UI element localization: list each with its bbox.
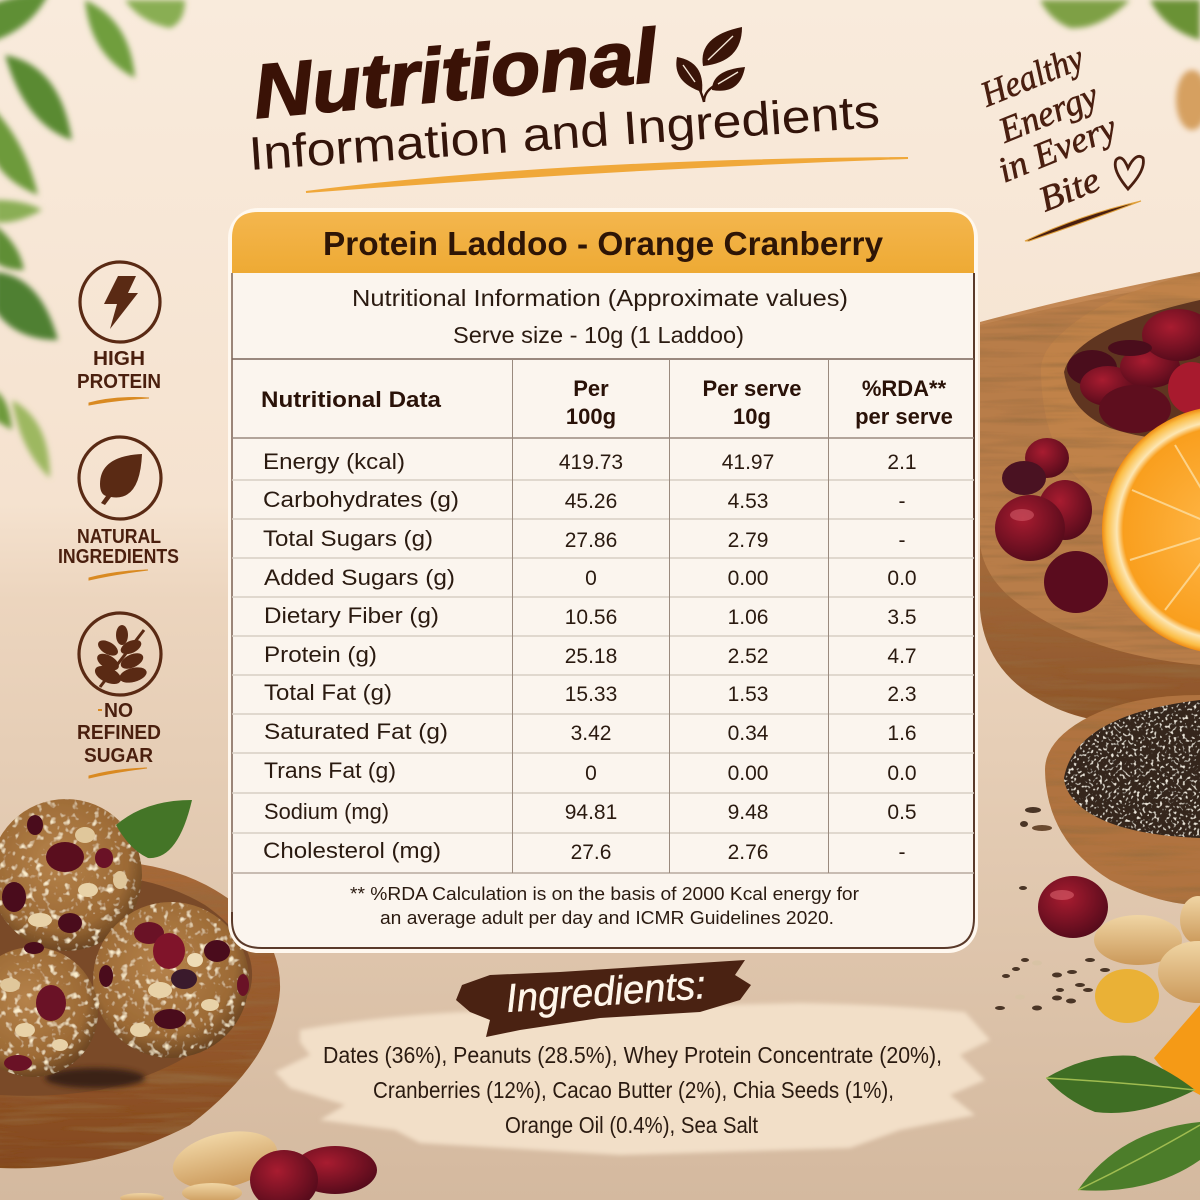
laddoo 2 bbox=[93, 902, 249, 1058]
table column: per serve bbox=[722, 451, 774, 864]
table row labels: Cholesterol (mg) bbox=[263, 838, 441, 863]
title underline bbox=[306, 158, 908, 192]
leaf behind bowl bbox=[116, 800, 192, 858]
table column headings: 100g bbox=[566, 404, 616, 429]
table column: %RDA: - bbox=[898, 529, 906, 552]
table column: %RDA bbox=[887, 451, 917, 864]
table column: per serve: 0.00 bbox=[728, 567, 768, 590]
card subtitle bbox=[352, 285, 848, 348]
table row labels: Total Sugars (g) bbox=[263, 526, 433, 551]
card header bbox=[232, 212, 974, 273]
icon: title leaves bbox=[676, 27, 745, 102]
badge: natural ingredients: NATURAL bbox=[77, 526, 161, 548]
table column: per serve: 2.76 bbox=[728, 841, 768, 864]
footnote bbox=[350, 884, 859, 928]
badge: high protein: PROTEIN bbox=[77, 371, 161, 393]
ingredients list: Dates (36%), Peanuts (28.5%), Whey Protein Concentrate (20%), bbox=[323, 1042, 942, 1068]
badge: natural ingredients: INGREDIENTS bbox=[58, 546, 179, 568]
table column: per serve: 41.97 bbox=[722, 451, 774, 474]
table column: %RDA: 0.0 bbox=[887, 762, 917, 785]
icon: heart bbox=[1115, 156, 1143, 189]
table row labels: Total Fat (g) bbox=[264, 680, 392, 705]
table column: per 100g: 3.42 bbox=[571, 722, 611, 745]
table column: per 100g: 27.86 bbox=[565, 529, 617, 552]
decorative blurred foliage: top right bbox=[1040, 0, 1200, 130]
ingredients list: Orange Oil (0.4%), Sea Salt bbox=[505, 1112, 759, 1138]
table row labels: Protein (g) bbox=[264, 642, 377, 667]
ingredients list: Cranberries (12%), Cacao Butter (2%), Chia Seeds (1%), bbox=[373, 1077, 894, 1103]
ingredients banner: Ingredients: bbox=[505, 963, 707, 1021]
orange half bbox=[1102, 406, 1200, 654]
table column: per serve: 2.79 bbox=[728, 529, 768, 552]
table column: %RDA: 3.5 bbox=[887, 606, 917, 629]
table column: per 100g bbox=[559, 451, 623, 864]
loose cranberries on board bbox=[995, 438, 1108, 613]
card subtitle: Serve size - 10g (1 Laddoo) bbox=[453, 322, 744, 348]
table column: per serve: 1.06 bbox=[728, 606, 768, 629]
tagline: Bite bbox=[1033, 159, 1105, 219]
table row labels bbox=[263, 449, 459, 863]
tagline: Healthy bbox=[974, 37, 1089, 115]
table row labels: Dietary Fiber (g) bbox=[264, 603, 439, 628]
table column: per 100g: 45.26 bbox=[565, 490, 617, 513]
peanuts and cranberries bottom bbox=[120, 1123, 377, 1200]
table row labels: Saturated Fat (g) bbox=[264, 719, 448, 744]
table column headings: Per bbox=[573, 376, 609, 401]
green leaves bottom right bbox=[1046, 1055, 1200, 1191]
title line 1: Nutritional bbox=[250, 13, 662, 135]
table column: %RDA: 2.3 bbox=[887, 683, 917, 706]
table column: per 100g: 10.56 bbox=[565, 606, 617, 629]
table column: %RDA: 0.0 bbox=[887, 567, 917, 590]
footnote: ** %RDA Calculation is on the basis of 2000 Kcal energy for bbox=[350, 884, 859, 904]
table column: per 100g: 15.33 bbox=[565, 683, 617, 706]
ingredients text panel bbox=[275, 1003, 990, 1155]
table column headings: 10g bbox=[733, 404, 771, 429]
table column: per 100g: 25.18 bbox=[565, 645, 617, 668]
table column: %RDA: 2.1 bbox=[887, 451, 917, 474]
card header: Protein Laddoo - Orange Cranberry bbox=[323, 225, 884, 262]
tagline: in Every bbox=[992, 107, 1122, 190]
red cranberry bbox=[1038, 876, 1108, 938]
table column: per 100g: 27.6 bbox=[571, 841, 611, 864]
table column: per serve: 4.53 bbox=[728, 490, 768, 513]
table column: %RDA: - bbox=[898, 841, 906, 864]
card subtitle: Nutritional Information (Approximate values) bbox=[352, 285, 848, 311]
table column headings: Per serve bbox=[702, 376, 802, 401]
wooden board with bowl of cranberries bbox=[980, 272, 1200, 724]
table row labels: Carbohydrates (g) bbox=[263, 487, 459, 512]
tagline underline bbox=[1025, 201, 1141, 241]
table column: per 100g: 419.73 bbox=[559, 451, 623, 474]
table column: %RDA: 0.5 bbox=[887, 801, 917, 824]
table column: per serve: 9.48 bbox=[728, 801, 768, 824]
laddoo 3 bbox=[0, 942, 98, 1077]
badge: no refined sugar bbox=[77, 613, 161, 778]
table column: per serve: 0.00 bbox=[728, 762, 768, 785]
title bbox=[247, 13, 908, 192]
table column headings: %RDA** bbox=[862, 376, 947, 401]
icon: leaf bbox=[100, 454, 142, 505]
table column: per serve: 0.34 bbox=[728, 722, 769, 745]
table column: per 100g: 0 bbox=[585, 762, 597, 785]
table column: per 100g: 94.81 bbox=[565, 801, 617, 824]
ingredients banner bbox=[456, 960, 751, 1037]
badge: high protein bbox=[77, 262, 161, 405]
bowl of protein laddoos bbox=[0, 799, 280, 1168]
table grid bbox=[232, 359, 974, 873]
table row labels: Added Sugars (g) bbox=[264, 565, 455, 590]
ingredients list bbox=[323, 1042, 942, 1138]
icon: crossed wheat bbox=[92, 625, 148, 688]
badge: no refined sugar: REFINED bbox=[77, 722, 161, 744]
title line 2: Information and Ingredients bbox=[247, 84, 881, 180]
table column headings: Nutritional Data bbox=[261, 387, 442, 412]
badge: no refined sugar: NO bbox=[104, 700, 133, 722]
badge: natural ingredients bbox=[58, 437, 179, 580]
table row labels: Sodium (mg) bbox=[264, 799, 389, 824]
table row labels: Trans Fat (g) bbox=[264, 758, 396, 783]
chia seed bowl bbox=[1045, 695, 1200, 905]
table column: per serve: 2.52 bbox=[728, 645, 768, 668]
table column: %RDA: 4.7 bbox=[887, 645, 917, 668]
icon: lightning bolt bbox=[104, 276, 138, 329]
wooden bowl bbox=[0, 860, 280, 1168]
table column headings: per serve bbox=[855, 404, 953, 429]
footnote: an average adult per day and ICMR Guidelines 2020. bbox=[380, 908, 834, 928]
table column headings bbox=[261, 376, 953, 429]
orange wedge bbox=[1154, 1005, 1200, 1095]
tagline bbox=[974, 37, 1143, 241]
laddoo 1 bbox=[0, 799, 142, 951]
bowl of cranberries bbox=[1041, 272, 1200, 510]
table column: per serve: 1.53 bbox=[728, 683, 768, 706]
badge: high protein: HIGH bbox=[93, 348, 145, 370]
decorative blurred foliage: top left bbox=[0, 0, 185, 478]
tagline: Energy bbox=[992, 75, 1104, 151]
table row labels: Energy (kcal) bbox=[263, 449, 405, 474]
panel: nutrition card bbox=[228, 208, 978, 953]
table column: %RDA: - bbox=[898, 490, 906, 513]
peanuts bbox=[1094, 896, 1200, 1023]
badge: no refined sugar: SUGAR bbox=[84, 745, 154, 767]
table column: %RDA: 1.6 bbox=[887, 722, 917, 745]
table column: per 100g: 0 bbox=[585, 567, 597, 590]
scattered chia seeds bbox=[995, 807, 1110, 1010]
